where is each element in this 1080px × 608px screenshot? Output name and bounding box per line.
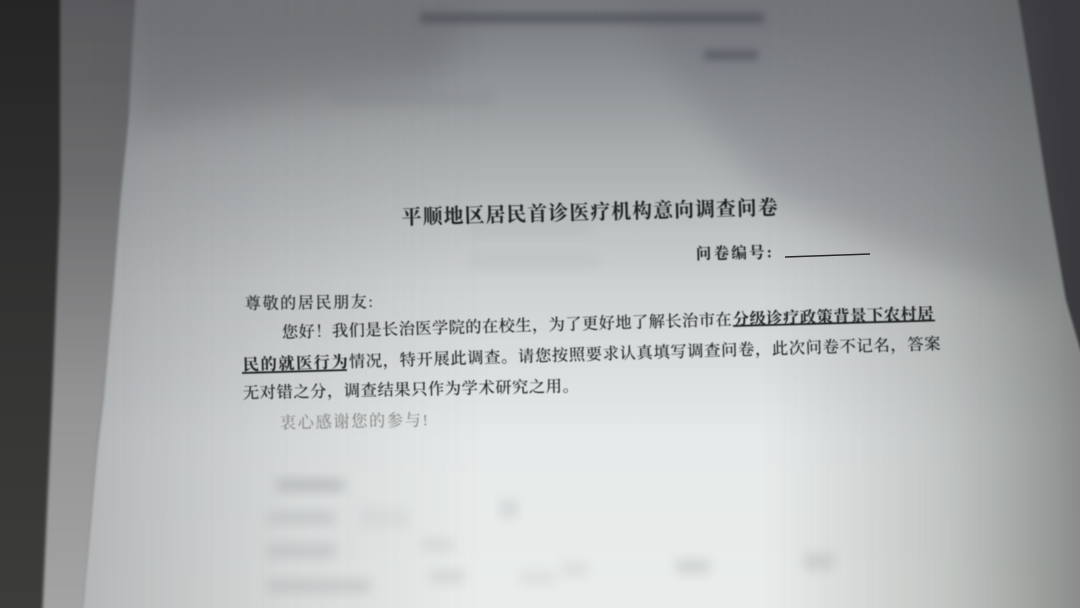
faint show-through text xyxy=(470,222,600,267)
shadow across upper left xyxy=(130,0,480,125)
line 2 underline xyxy=(242,370,347,373)
line 2: 民的就医行为 xyxy=(243,352,348,374)
shadow across upper right xyxy=(620,0,1055,300)
salutation: 尊敬的居民朋友: xyxy=(245,292,373,313)
line 3: 无对错之分，调查结果只作为学术研究之用。 xyxy=(243,376,579,402)
line 2: 情况，特开展此调查。请您按照要求认真填写调查问卷，此次问卷不记名，答案 xyxy=(348,334,941,371)
blurred header text xyxy=(330,13,764,106)
line 1: 分级诊疗政策背景下农村居 xyxy=(732,304,934,329)
underlying sheet strip xyxy=(42,0,140,608)
intro paragraph xyxy=(242,304,941,402)
blurred question rows xyxy=(267,479,834,593)
questionnaire number field xyxy=(696,242,870,263)
survey title: 平顺地区居民首诊医疗机构意向调查问卷 xyxy=(402,196,778,229)
line 1 underline xyxy=(733,320,935,326)
line 1: 您好！我们是长治医学院的在校生，为了更好地了解长治市在 xyxy=(282,310,732,342)
questionnaire number field: 问卷编号: xyxy=(696,242,772,263)
thank-you line: 衷心感谢您的参与! xyxy=(280,410,428,432)
right dark background xyxy=(1000,0,1080,400)
